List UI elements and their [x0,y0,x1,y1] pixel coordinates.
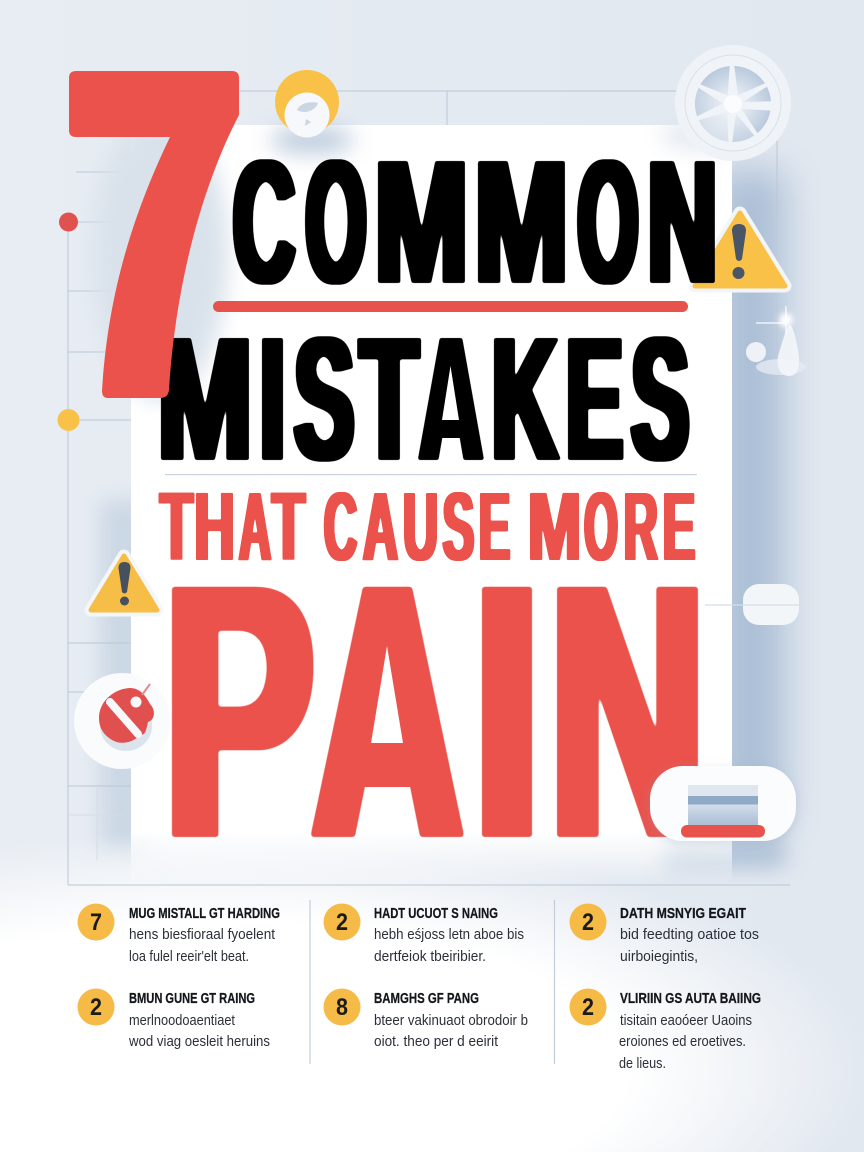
heading: MISTAKES: A [420,301,482,496]
dot: yellow [58,409,80,431]
item 2: wod viag oesleit heruins [128,1033,270,1050]
heading: MISTAKES [157,301,689,496]
heading: MISTAKES: I [260,301,285,496]
item 3: hebh eśjoss letn aboe bis [374,926,524,943]
red divider [213,301,688,312]
heading: MISTAKES: E [566,301,623,496]
subheading: THAT CAUSE MORE: A [239,472,271,581]
item 2: BMUN GUNE GT RAING [129,991,255,1007]
item 6: eroiones ed eroetives. [619,1033,746,1050]
icon: red prohibition badge [74,673,170,769]
item 5: DATH MSNYIG EGAIT [620,906,746,922]
item 6: de lieus. [619,1055,666,1072]
heading: COMMON: N [648,124,717,319]
item 5: bid feedting oatioe tos [620,926,759,943]
heading: COMMON [233,124,717,319]
item 2: merlnoodoaentiaet [129,1012,236,1029]
subheading: THAT CAUSE MORE: O [584,472,618,581]
item 5: uirboiegintis, [620,948,698,965]
heading: COMMON: O [578,124,638,319]
heading: PAIN: N [550,511,705,911]
icon: white pill with card [650,766,796,841]
numeral 7 [69,71,239,398]
subheading: THAT CAUSE MORE: T [272,472,305,581]
icon: small white pill [705,584,799,625]
icon: yellow circle badge [275,70,339,138]
subheading: THAT CAUSE MORE: T [160,472,193,581]
subheading: THAT CAUSE MORE: H [194,472,235,581]
heading: PAIN [164,511,705,911]
white panel [131,125,732,885]
heading: MISTAKES: M [157,301,253,496]
text: S [631,301,689,496]
dot: red [59,212,78,232]
item 3: 2 [336,909,348,936]
item 6 [570,988,761,1072]
heading: MISTAKES: S [294,301,354,496]
item 4 [324,988,528,1050]
subheading: THAT CAUSE MORE: E [479,472,510,581]
item 1: hens biesfioraal fyoelent [129,926,276,943]
subheading: THAT CAUSE MORE: U [403,472,438,581]
heading: COMMON: O [306,124,366,319]
panel soft tints [92,110,740,400]
icon: wheel [675,45,791,161]
item 4: oiot. theo per d eeirit [374,1033,499,1050]
item 1: MUG MISTALL GT HARDING [129,906,280,922]
item 1 [78,904,280,965]
item 5 [570,904,759,965]
heading: COMMON: C [233,124,295,319]
grid lines [68,91,790,885]
subheading: THAT CAUSE MORE [160,472,695,581]
heading: PAIN: I [472,511,542,911]
icon: warning triangle left [91,556,157,610]
item 1: loa fulel reeir'elt beat. [129,948,249,965]
thin divider [165,474,697,475]
subheading: THAT CAUSE MORE: S [443,472,474,581]
item 3: HADT UCUOT S NAING [374,906,498,922]
item 2: 2 [90,994,102,1021]
heading: PAIN: P [164,511,314,911]
heading: COMMON: M [374,124,468,319]
subheading: THAT CAUSE MORE: A [363,472,398,581]
icon: warning triangle right [695,213,785,286]
heading: MISTAKES: K [492,301,557,496]
icon: sparkle orb [746,306,806,376]
item 6: VLIRIIN GS AUTA BAIING [620,991,761,1007]
item 4: bteer vakinuaot obrodoir b [374,1012,528,1029]
item 3: dertfeiok tbeiribier. [374,948,486,965]
heading: PAIN: A [313,511,462,911]
subheading: THAT CAUSE MORE: M [528,472,581,581]
subheading: THAT CAUSE MORE: R [624,472,658,581]
item 6: tisitain eaoóeer Uaoins [620,1012,752,1029]
bottom wash [0,830,864,1152]
item 4: 8 [336,994,348,1021]
heading: COMMON: M [474,124,568,319]
subheading: THAT CAUSE MORE: C [324,472,357,581]
soft panel shadows [100,170,785,868]
item 2 [78,988,270,1050]
item 1: 7 [90,909,102,936]
subheading: THAT CAUSE MORE: E [663,472,695,581]
item 3 [324,904,524,965]
heading: MISTAKES: T [360,301,418,496]
item 6: 2 [582,994,594,1021]
item 5: 2 [582,909,594,936]
column dividers [310,900,554,1064]
item 4: BAMGHS GF PANG [374,991,479,1007]
